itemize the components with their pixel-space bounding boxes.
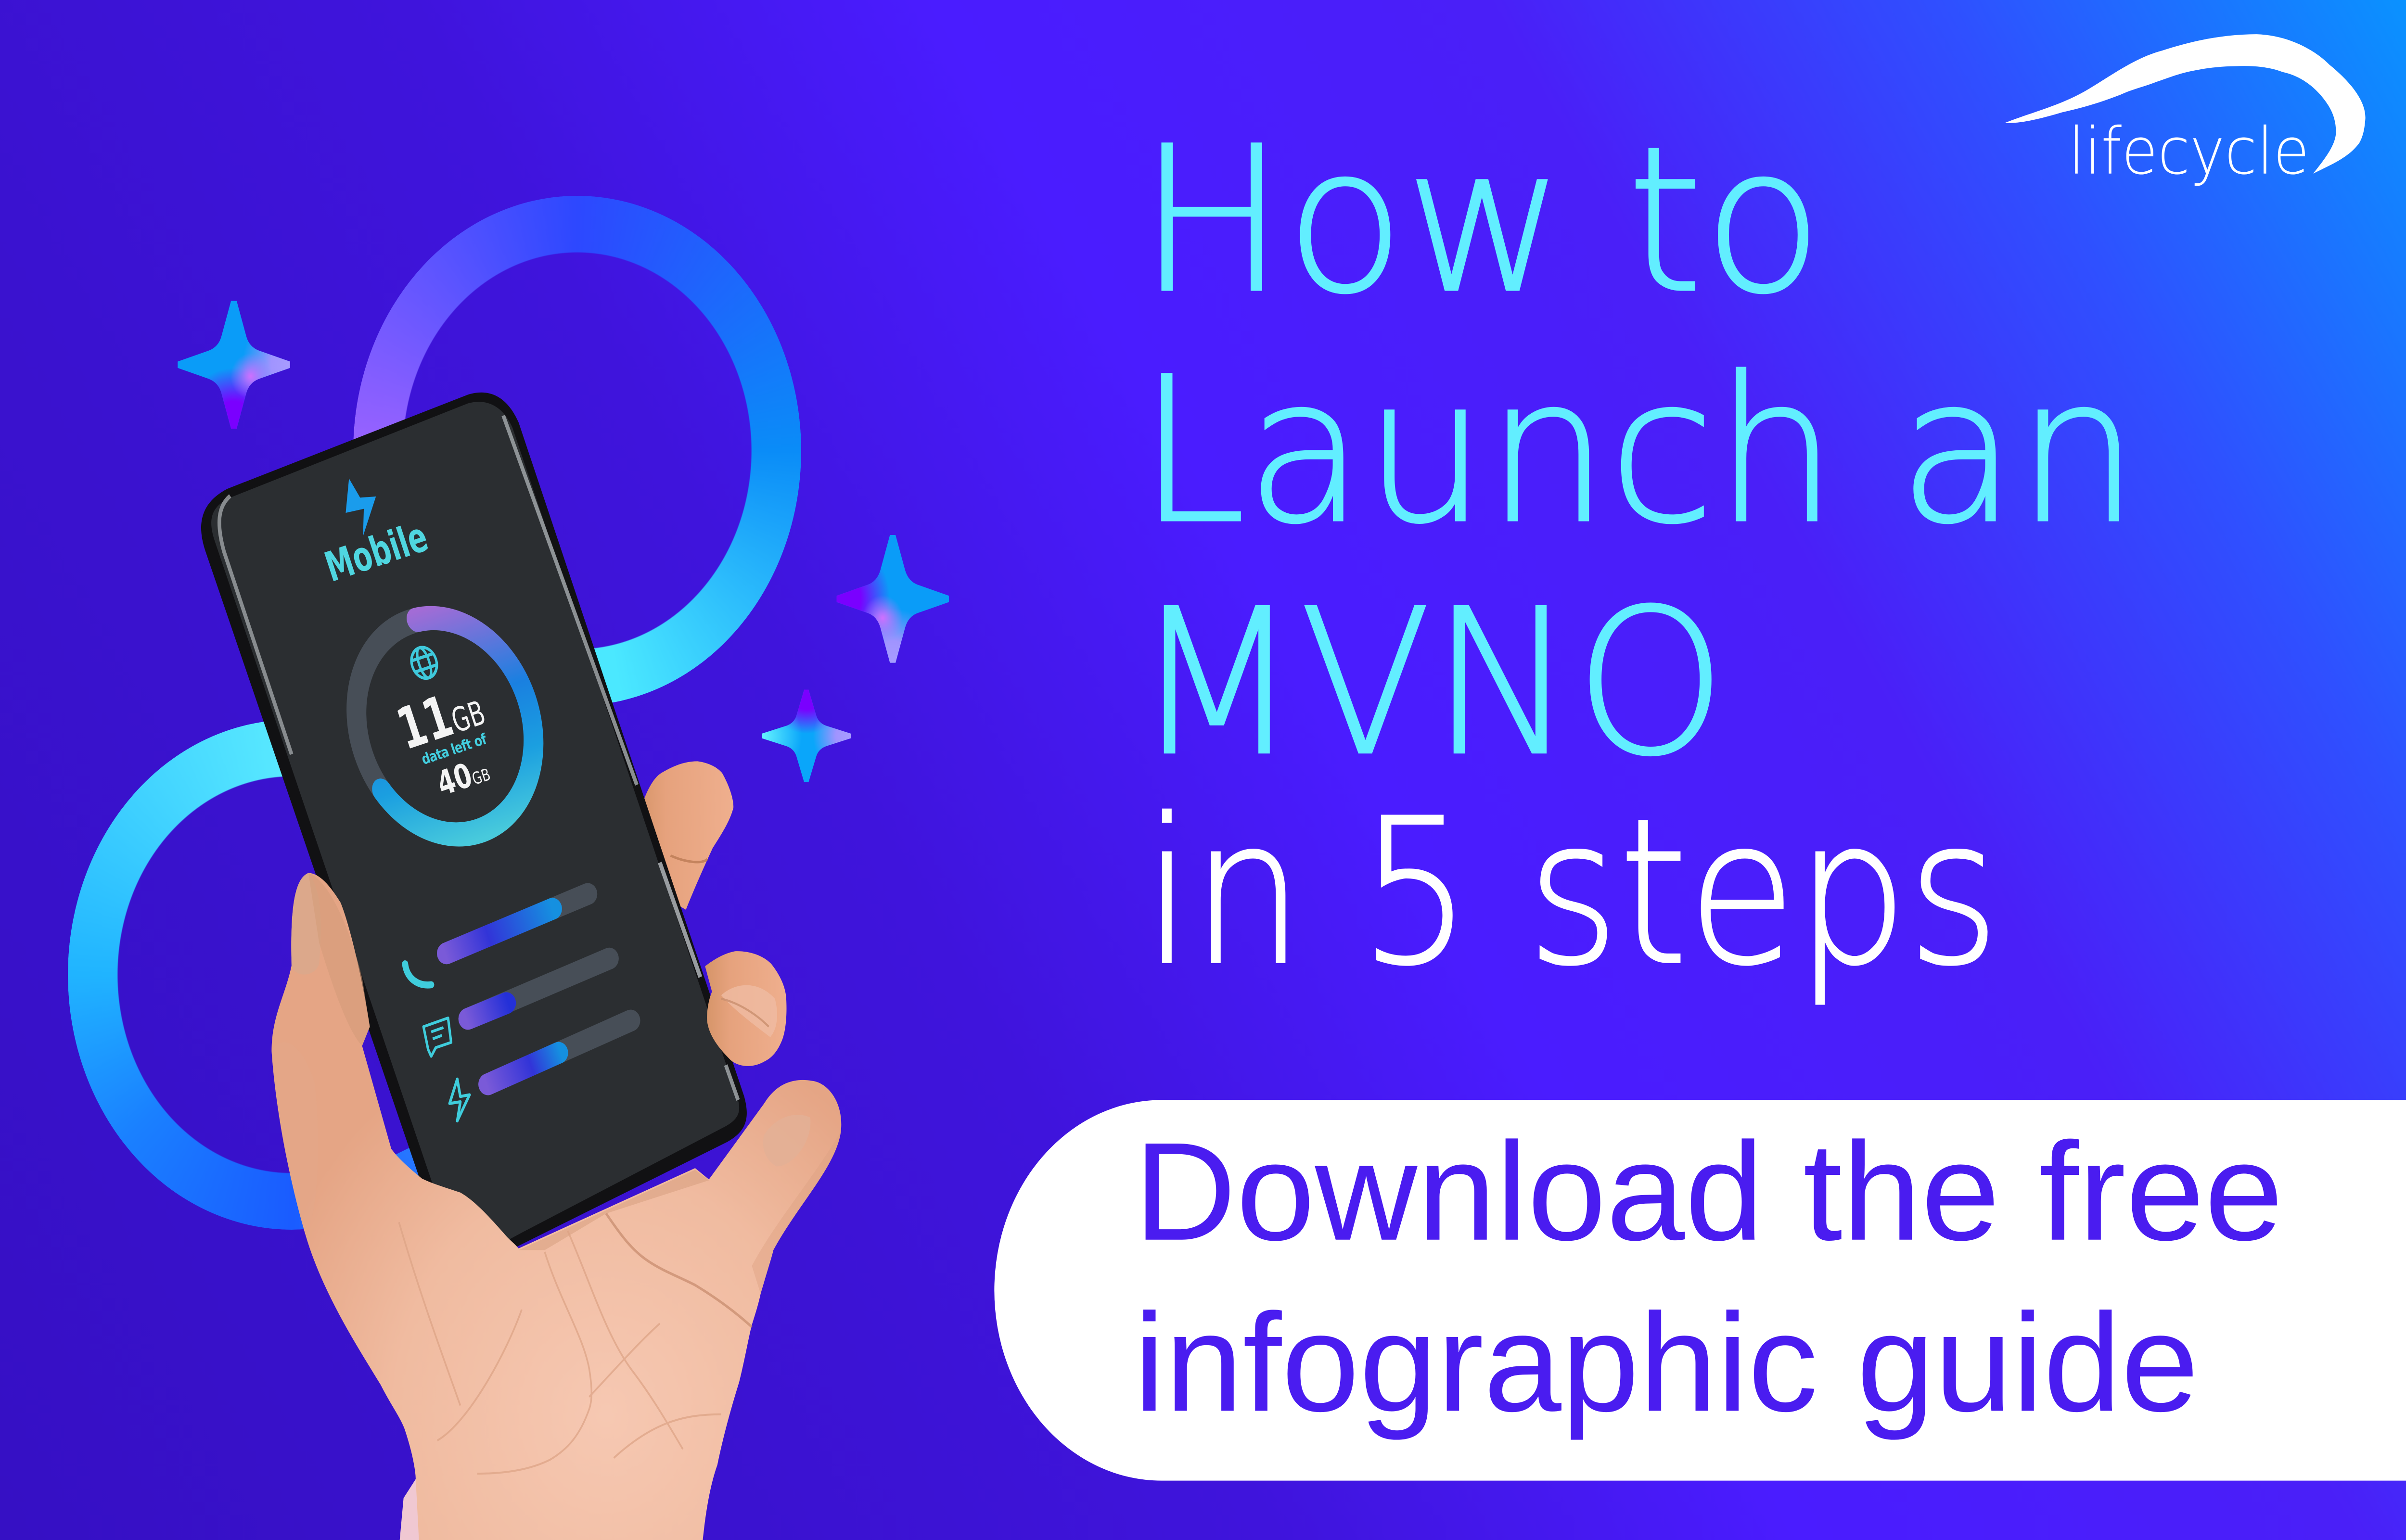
title <box>1134 103 2139 1010</box>
cta line 2: infographic guide <box>1134 1285 2199 1441</box>
call to action pill <box>994 1100 2406 1481</box>
readout: data left of: data left of <box>420 730 489 768</box>
hand: palm, thumb and little finger <box>271 873 841 1540</box>
shadow below phone <box>519 1170 709 1250</box>
donut track <box>329 594 561 858</box>
icon: handset <box>405 964 431 985</box>
decorative ring: lower <box>68 722 419 1230</box>
phone screen <box>211 402 739 1266</box>
bolt logo <box>336 472 386 539</box>
title line: How to: How to <box>1139 103 1823 337</box>
phone edge highlights <box>219 416 738 1100</box>
usage bar: messages <box>468 958 609 1019</box>
title line: in 5 steps: in 5 steps <box>1143 776 1999 1010</box>
usage bar: data <box>488 1020 631 1084</box>
little finger nail <box>763 1115 810 1166</box>
logo wordmark: lifecycle <box>2068 114 2309 189</box>
phone UI: data panel <box>281 447 561 858</box>
readout: 11GB: 11GB <box>389 673 492 763</box>
icon: sparkle star right large <box>837 535 949 663</box>
sleeve <box>400 1479 423 1540</box>
index finger behind phone <box>637 761 733 910</box>
icon: sparkle star right small <box>762 690 851 782</box>
icon: globe <box>408 644 441 682</box>
title line: Launch an: Launch an <box>1139 334 2139 568</box>
logo: lifecycle <box>2005 34 2366 189</box>
label: Mobile: Mobile <box>320 512 434 592</box>
icon: bolt outline <box>449 1079 470 1121</box>
phone <box>201 393 747 1280</box>
readout: 40GB: 40GB <box>432 750 494 803</box>
donut progress <box>335 595 561 856</box>
palm creases <box>399 1213 752 1474</box>
phone body <box>201 393 747 1280</box>
cta line 1: Download the free <box>1134 1113 2283 1269</box>
usage bar: calls <box>447 894 588 954</box>
decorative ring: upper <box>353 196 801 706</box>
title line: MVNO: MVNO <box>1134 566 1726 800</box>
thumb shading <box>291 873 321 975</box>
icon: chat bubble <box>423 1018 451 1056</box>
middle finger over phone edge <box>705 951 786 1066</box>
logo swoosh <box>2005 34 2366 174</box>
icon: sparkle star left <box>178 301 290 429</box>
background patch between thumb and phone <box>362 1044 414 1156</box>
